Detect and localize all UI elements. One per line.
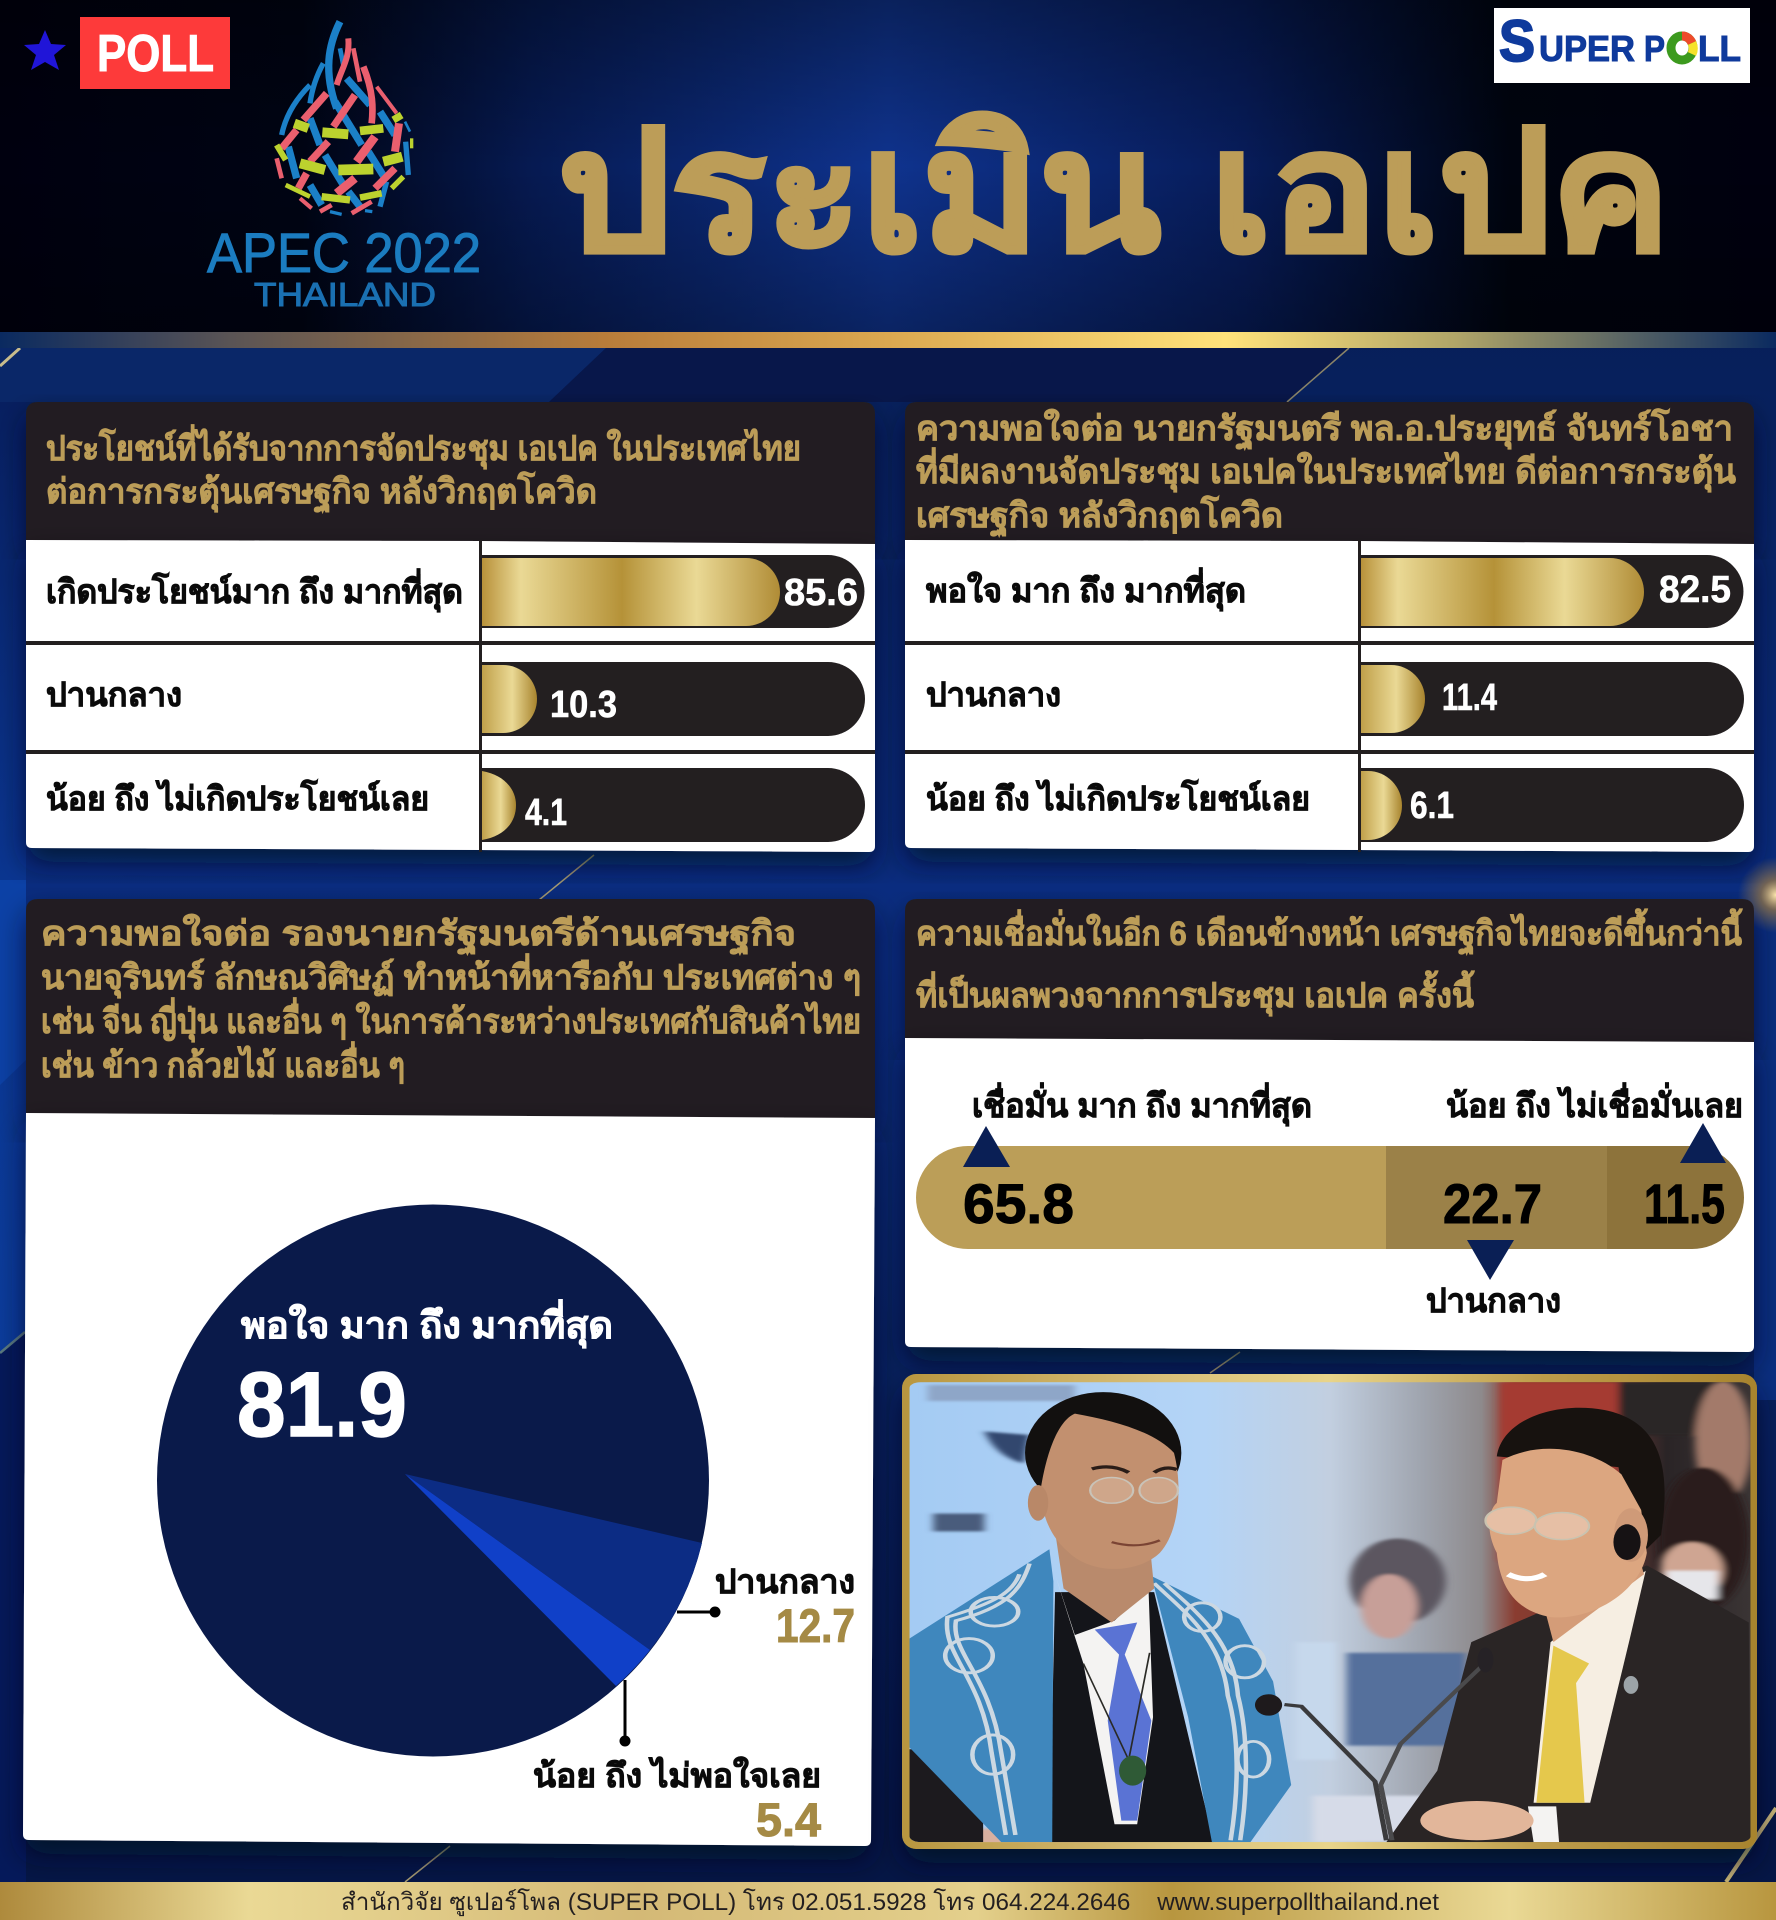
label: low (533, 1680, 821, 1846)
row: satisfied: พอใจ มาก ถึง มากที่สุด (926, 567, 1246, 612)
icon: poll donut (1671, 36, 1693, 60)
logo wordmark: APEC 2022 (207, 221, 481, 284)
panel: satisfaction with deputy prime minister (23, 899, 875, 1846)
pie chart (157, 1204, 855, 1846)
row: low benefit: น้อย ถึง ไม่เกิดประโยชน์เลย (46, 779, 429, 817)
label: confident: เชื่อมั่น มาก ถึง มากที่สุด (972, 1082, 1312, 1127)
panel heading: เศรษฐกิจ หลังวิกฤตโควิด (916, 495, 1283, 538)
label: moderate: ปานกลาง (715, 1563, 855, 1600)
stacked bar: 65.8 (963, 1172, 1074, 1235)
row: low benefit (46, 768, 865, 842)
label: confident (963, 1082, 1312, 1167)
panel: benefit of hosting APEC (26, 402, 875, 852)
label: not confident: น้อย ถึง ไม่เชื่อมั่นเลย (1446, 1082, 1743, 1124)
label: moderate: 12.7 (776, 1599, 855, 1652)
row: satisfied (926, 555, 1743, 628)
panel heading: เช่น จีน ญี่ปุ่น และอื่น ๆ ในการค้าระหว่างประเทศกับสินค้าไทย (41, 997, 861, 1043)
row: moderate: 11.4 (1442, 677, 1497, 719)
row: high benefit (46, 555, 864, 628)
row: moderate: 10.3 (550, 684, 617, 726)
panel heading: ความพอใจต่อ รองนายกรัฐมนตรีด้านเศรษฐกิจ (41, 913, 796, 956)
row: moderate (46, 662, 865, 736)
background facets (0, 348, 1776, 1882)
man on right (1381, 1408, 1750, 1842)
row: moderate (926, 662, 1744, 736)
row: moderate: ปานกลาง (46, 676, 182, 713)
panel heading (916, 408, 1736, 538)
row: low (926, 768, 1744, 842)
stacked bar: 11.5 (1644, 1172, 1725, 1235)
row: low benefit: 4.1 (525, 792, 567, 834)
title: ประเมิน เอเปค (558, 98, 1670, 286)
gold divider bar (0, 332, 1776, 348)
panel heading (916, 908, 1743, 1017)
panel heading: ต่อการกระตุ้นเศรษฐกิจ หลังวิกฤตโควิด (46, 471, 597, 514)
panel: confidence in next six months (905, 899, 1754, 1352)
Super Poll logo: S (1499, 9, 1535, 74)
label: not confident (1446, 1082, 1743, 1163)
row: high benefit: 85.6 (784, 572, 858, 614)
row: low: น้อย ถึง ไม่เกิดประโยชน์เลย (926, 779, 1310, 817)
panel heading: ประโยชน์ที่ได้รับจากการจัดประชุม เอเปค ในประเทศไทย (46, 424, 801, 470)
icon: woven drop (277, 22, 412, 214)
APEC 2022 Thailand logo (207, 22, 481, 313)
panel heading (41, 913, 861, 1085)
Super Poll logo: UPER (1539, 28, 1635, 69)
label: satisfied: 81.9 (237, 1354, 407, 1456)
label: low: 5.4 (756, 1793, 821, 1846)
row: satisfied: 82.5 (1659, 569, 1731, 611)
panel: satisfaction with prime minister (905, 402, 1754, 852)
label: satisfied: พอใจ มาก ถึง มากที่สุด (241, 1299, 613, 1349)
footer: สำนักวิจัย ซูเปอร์โพล (SUPER POLL) โทร 02.051.5928 โทร 064.224.2646 www.superpollthailand.net (341, 1888, 1439, 1917)
footer (0, 1882, 1776, 1920)
panel heading: ความพอใจต่อ นายกรัฐมนตรี พล.อ.ประยุทธ์ จันทร์โอชา (916, 408, 1733, 451)
panel heading: ที่เป็นผลพวงจากการประชุม เอเปค ครั้งนี้ (916, 970, 1475, 1017)
microphone (1255, 1694, 1386, 1840)
logo country: THAILAND (254, 276, 436, 313)
label: low: น้อย ถึง ไม่พอใจเลย (533, 1756, 821, 1794)
panel heading (46, 424, 801, 514)
man on left (910, 1392, 1291, 1842)
stacked bar (916, 1146, 1744, 1249)
label: moderate (677, 1563, 855, 1652)
row: low: 6.1 (1410, 785, 1454, 827)
header band (0, 0, 1776, 348)
icon: star (24, 30, 66, 70)
Super Poll logo (1494, 8, 1750, 83)
Super Poll logo: P (1644, 28, 1665, 69)
panel heading: นายจุรินทร์ ลักษณวิศิษฏ์ ทำหน้าที่หารือกับ ประเทศต่าง ๆ (41, 953, 861, 999)
POLL badge (80, 17, 230, 89)
panel heading: เช่น ข้าว กล้วยไม้ และอื่น ๆ (41, 1041, 405, 1085)
stacked bar: 22.7 (1443, 1172, 1542, 1235)
label: moderate: ปานกลาง (1426, 1282, 1561, 1319)
label: moderate (1426, 1240, 1561, 1319)
POLL badge: POLL (97, 25, 214, 83)
row: moderate: ปานกลาง (926, 676, 1061, 713)
photo: two ministers (902, 1374, 1757, 1849)
panel heading: ที่มีผลงานจัดประชุม เอเปคในประเทศไทย ดีต่อการกระตุ้น (916, 447, 1736, 493)
Super Poll logo: LL (1698, 28, 1741, 69)
label: satisfied (237, 1299, 613, 1456)
row: high benefit: เกิดประโยชน์มาก ถึง มากที่สุด (46, 568, 463, 613)
